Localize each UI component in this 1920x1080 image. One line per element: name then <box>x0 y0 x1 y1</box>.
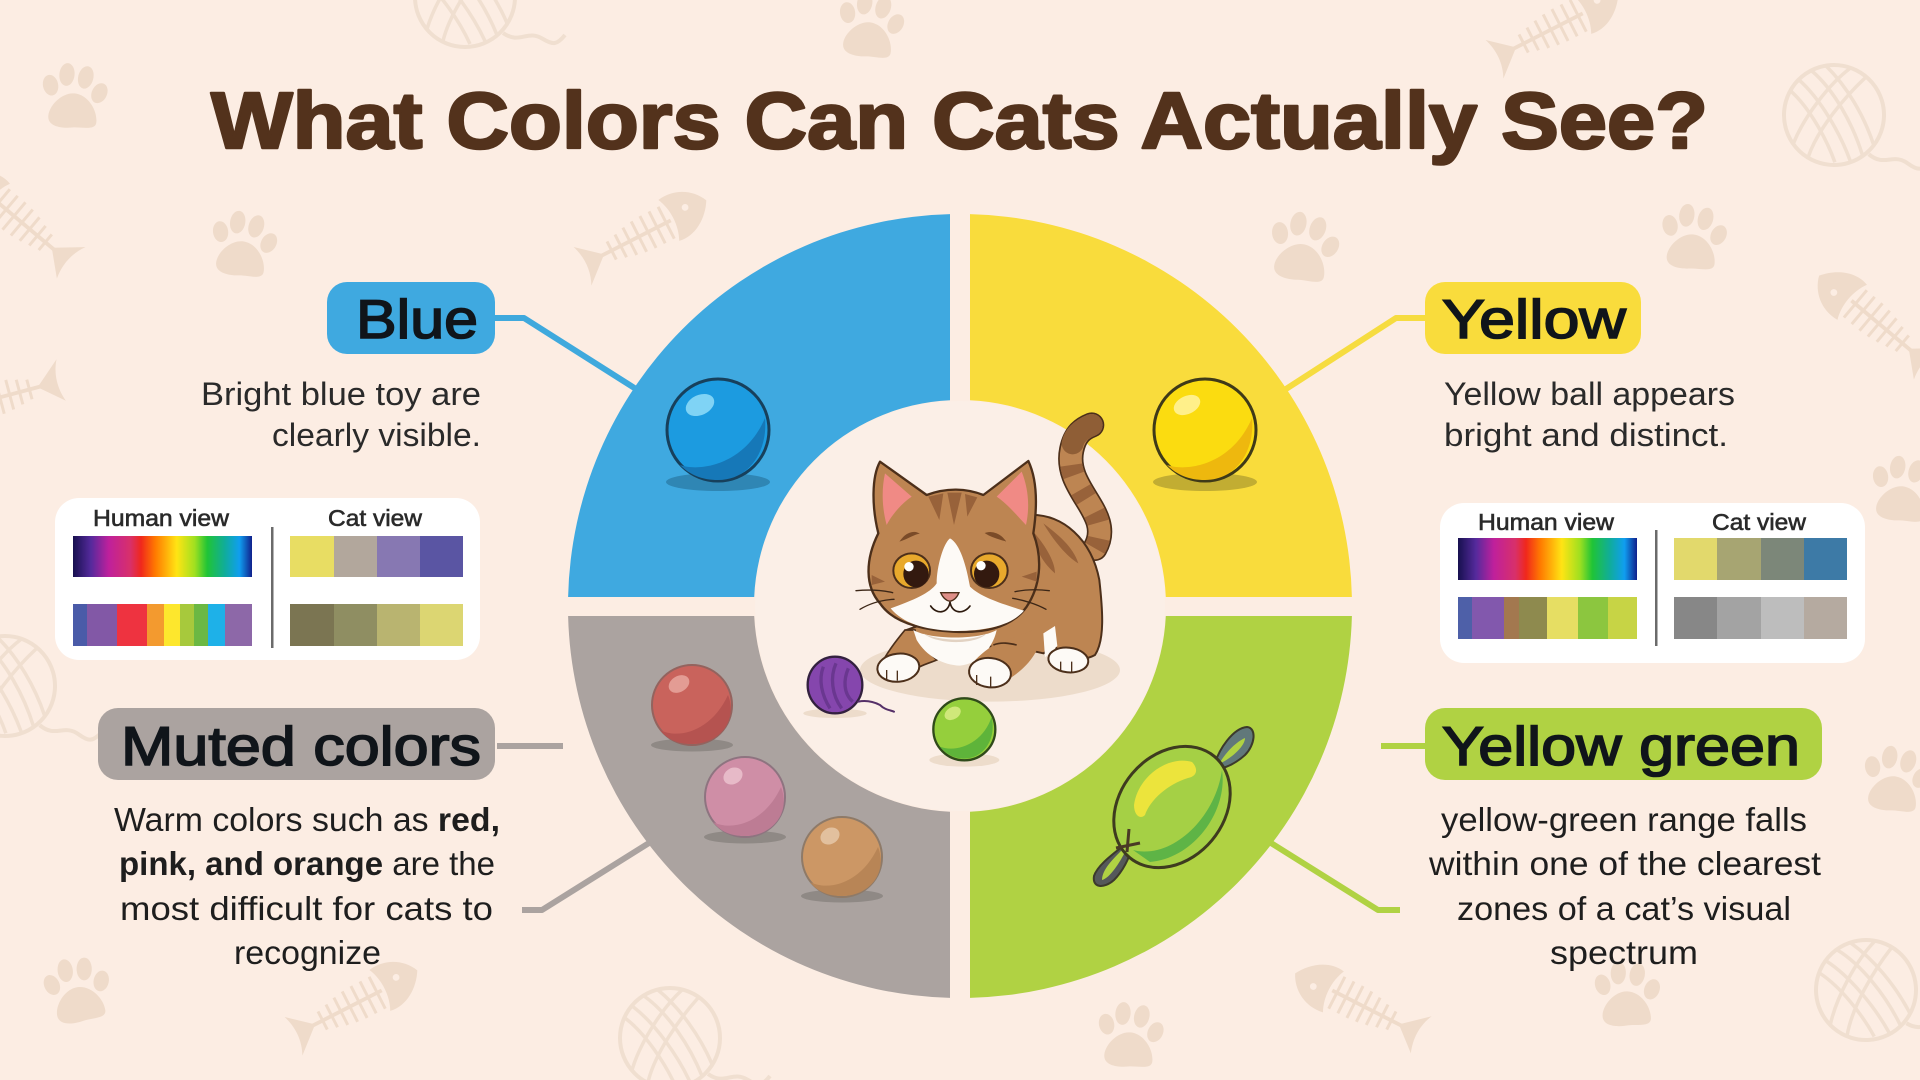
muzzle <box>891 538 1024 631</box>
panel: blue human and cat view <box>55 498 480 660</box>
illustration: cat with toys <box>803 425 1120 767</box>
text block: muted colors: pink, and orange are the <box>119 845 495 882</box>
center circle <box>755 401 1165 811</box>
left foreleg <box>882 630 937 667</box>
human swatches <box>1458 597 1637 639</box>
whiskers <box>856 590 1049 609</box>
text block: muted colors: recognize <box>234 934 381 971</box>
label: Muted colors: Muted colors <box>121 715 481 777</box>
ears <box>883 473 912 525</box>
segment: muted gray <box>568 616 950 998</box>
human swatches <box>73 604 252 646</box>
forehead stripes <box>928 493 977 525</box>
text block: blue: Bright blue toy are <box>201 376 481 412</box>
label: Yellow green: Yellow green <box>1442 715 1800 777</box>
divider <box>271 527 274 648</box>
color wheel <box>568 214 1352 998</box>
icon: blue ball <box>666 379 770 491</box>
label: Blue: Blue <box>356 288 478 350</box>
text block: blue <box>201 376 481 453</box>
text block: blue: clearly visible. <box>272 417 481 453</box>
text block: yellow green <box>1428 801 1821 971</box>
label: human view: Human view <box>1478 509 1614 535</box>
label: cat view: Cat view <box>1712 509 1806 535</box>
nose and mouth <box>941 593 959 601</box>
text block: yellow <box>1444 376 1735 453</box>
leader lines <box>495 318 1425 910</box>
human spectrum <box>73 536 252 577</box>
panel: yellow human and cat view <box>1440 503 1865 663</box>
eyes <box>893 553 930 588</box>
brows <box>902 533 1004 540</box>
head <box>869 461 1039 632</box>
text block: yellow green: spectrum <box>1550 934 1698 971</box>
text block: yellow green: zones of a cat’s visual <box>1457 890 1791 927</box>
purple yarn <box>803 709 867 718</box>
segment: yellow <box>970 214 1352 597</box>
label: Yellow <box>1425 282 1641 354</box>
label: Yellow green <box>1425 708 1822 780</box>
label: Blue <box>327 282 495 354</box>
segment: blue <box>568 214 950 597</box>
icon: yellow ball <box>1153 379 1257 491</box>
label: Yellow: Yellow <box>1442 288 1626 350</box>
right foreleg <box>970 627 1042 680</box>
paws <box>876 652 921 684</box>
cheek stripes <box>872 572 1037 585</box>
icon: muted pink ball <box>704 757 786 844</box>
text block: yellow: Yellow ball appears <box>1444 376 1735 412</box>
text block: yellow green: within one of the clearest <box>1428 845 1821 882</box>
chest <box>913 630 997 666</box>
green ball <box>929 753 999 767</box>
text block: muted colors: most difficult for cats to <box>120 890 493 927</box>
cat swatches top <box>1674 538 1847 580</box>
divider <box>1655 530 1658 646</box>
icon: muted orange ball <box>801 817 883 902</box>
title: What Colors Can Cats Actually See? <box>211 76 1708 165</box>
segment: yellow green <box>970 616 1352 998</box>
belly patch <box>1043 626 1057 657</box>
text block: muted colors: Warm colors such as red, <box>114 801 500 838</box>
label: human view: Human view <box>93 505 229 531</box>
text block: muted colors <box>114 801 500 971</box>
icon: muted red ball <box>651 665 733 752</box>
text block: yellow: bright and distinct. <box>1444 417 1728 453</box>
shadow <box>860 638 1120 702</box>
body <box>907 515 1102 659</box>
cat swatches top <box>290 536 463 577</box>
label: cat view: Cat view <box>328 505 422 531</box>
body stripes <box>1033 523 1078 573</box>
human spectrum <box>1458 538 1637 580</box>
label: Muted colors <box>98 708 495 780</box>
icon: green candy toy <box>1090 723 1254 891</box>
cat swatches bottom <box>290 604 463 646</box>
cat swatches bottom <box>1674 597 1847 639</box>
tail <box>1071 425 1100 548</box>
text block: yellow green: yellow-green range falls <box>1441 801 1807 838</box>
